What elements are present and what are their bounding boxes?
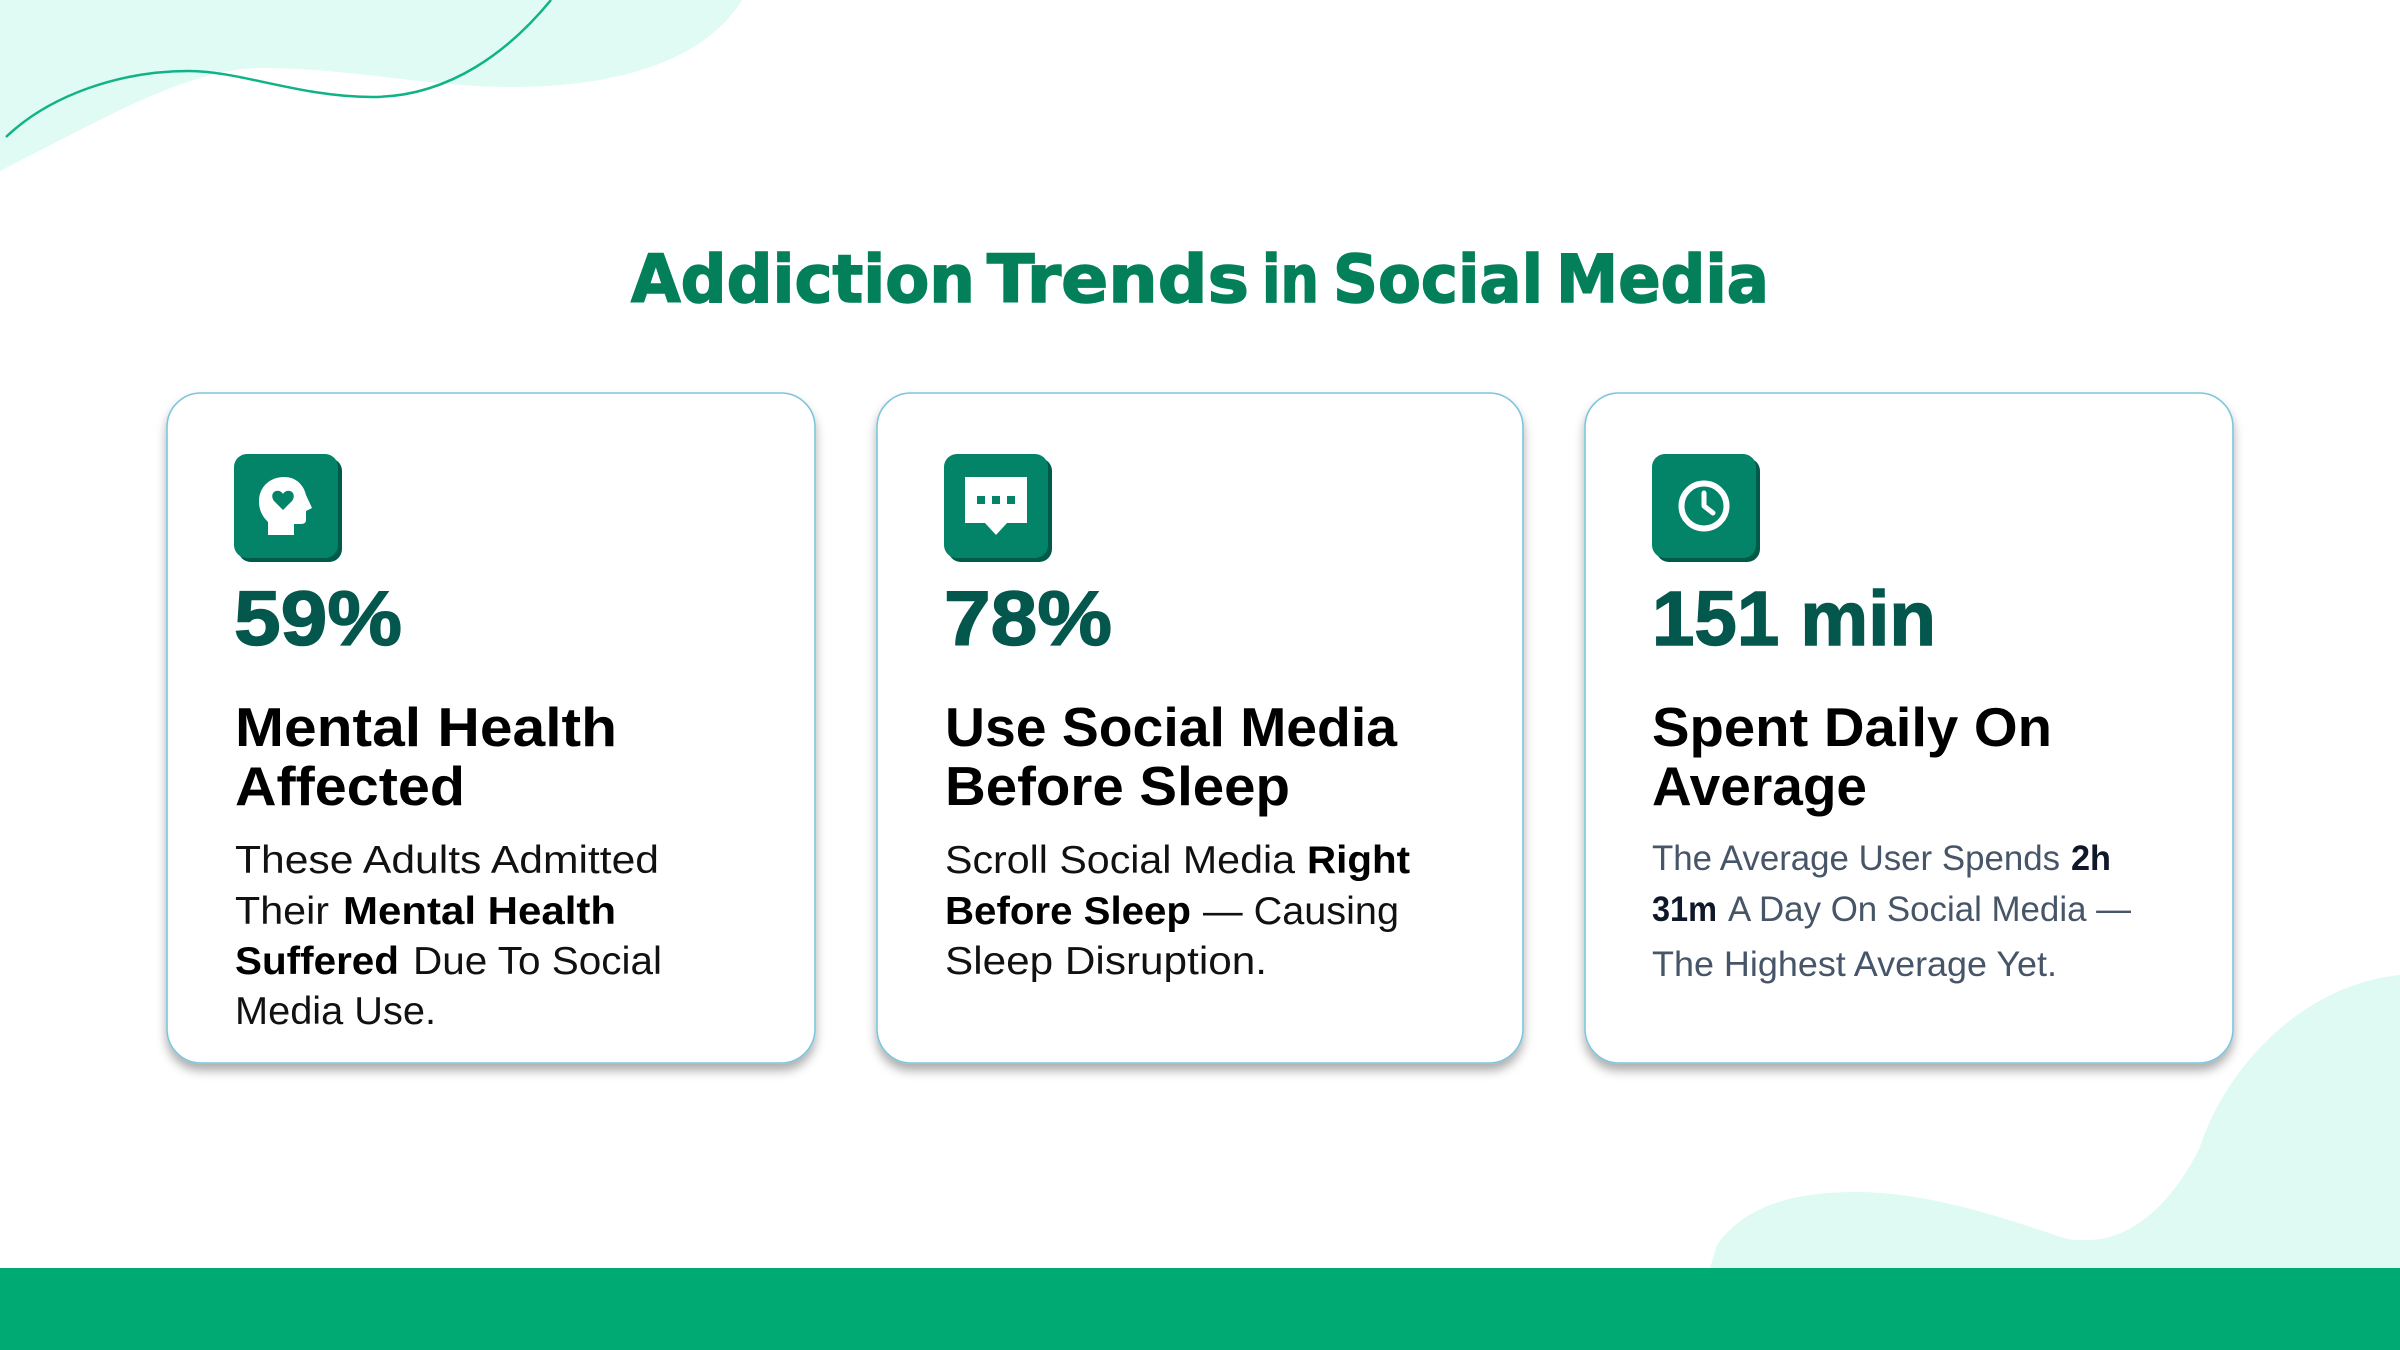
heading: Spent Daily On Average (1652, 696, 2052, 817)
heading: Mental Health Affected: Affected (235, 755, 465, 817)
stat: 151 min: 151 min (1652, 576, 1936, 662)
icon: head with heart (234, 454, 342, 562)
body text: A Day On Social Media — (1728, 890, 2131, 929)
card background (1585, 393, 2233, 1063)
heading: Use Social Media Before Sleep: Use Social Media (945, 696, 1397, 758)
heading: Spent Daily On Average: Average (1652, 755, 1867, 817)
title: Social (1333, 241, 1543, 318)
decorative curve: top left (6, 0, 551, 137)
body text: 2h (2071, 839, 2111, 878)
panel: before sleep card (877, 393, 1523, 1063)
card background (167, 393, 815, 1063)
stat: 78%: 78% (944, 576, 1112, 662)
card background (877, 393, 1523, 1063)
body text: Suffered (235, 940, 399, 983)
title: Addiction (631, 241, 975, 318)
body text (1652, 839, 2131, 984)
heading: Mental Health Affected: Mental Health (235, 696, 617, 758)
body text: — Causing (1203, 890, 1399, 933)
body text: 31m (1652, 890, 1717, 929)
body text: Media Use. (235, 990, 436, 1033)
stat: 59%: 59% (234, 576, 402, 662)
heading: Use Social Media Before Sleep (945, 696, 1397, 817)
body text: Scroll Social Media (945, 839, 1295, 882)
icon: chat bubble (944, 454, 1052, 562)
body text (945, 839, 1410, 983)
body text: The Average User Spends (1652, 839, 2060, 878)
background blob: bottom right (1710, 975, 2400, 1268)
body text: These Adults Admitted (235, 839, 659, 882)
panel: mental health card (167, 393, 815, 1063)
background blob: top left (0, 0, 742, 171)
bottom bar (0, 1268, 2400, 1350)
icon: clock (1652, 454, 1760, 562)
body text: Sleep Disruption. (945, 940, 1267, 983)
body text: Their (235, 890, 329, 933)
heading: Mental Health Affected (235, 696, 617, 817)
title: Trends (987, 241, 1249, 318)
body text: The Highest Average Yet. (1652, 945, 2057, 984)
title: Media (1556, 241, 1769, 318)
body text: Due To Social (413, 940, 662, 983)
body text (235, 839, 662, 1033)
title (631, 241, 1769, 318)
body text: Mental Health (343, 890, 616, 933)
panel: daily time card (1585, 393, 2233, 1063)
body text: Before Sleep (945, 890, 1191, 933)
title: in (1262, 241, 1319, 318)
heading: Spent Daily On Average: Spent Daily On (1652, 696, 2052, 758)
heading: Use Social Media Before Sleep: Before Sleep (945, 755, 1290, 817)
body text: Right (1307, 839, 1410, 882)
